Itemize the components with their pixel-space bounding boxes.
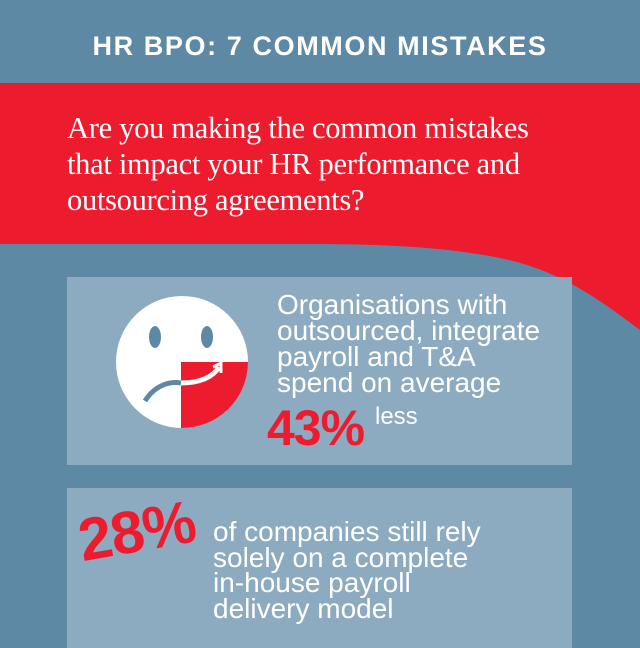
stat text: delivery model <box>213 592 394 624</box>
stat: 28%: 28% <box>73 488 200 574</box>
stat text: in-house payroll <box>213 567 411 598</box>
panel: in-house payroll <box>67 488 572 648</box>
stat text: outsourced, integrate <box>277 315 540 346</box>
stat text: solely on a complete <box>213 542 468 572</box>
title: HR BPO: 7 COMMON MISTAKES <box>92 31 548 61</box>
stat text: of companies still rely <box>213 516 481 547</box>
question text: that impact your HR performance and <box>67 147 520 181</box>
stat text: Organisations with <box>277 289 507 320</box>
label: less: less <box>375 403 418 430</box>
stat: 43%: 43% <box>267 400 364 456</box>
icon: half smiley face <box>116 296 248 428</box>
stat text <box>277 289 540 398</box>
question text: outsourcing agreements? <box>67 183 364 217</box>
stat text: payroll and T&A <box>277 341 476 372</box>
question text: Are you making the common mistakes <box>67 111 529 145</box>
stat text: spend on average <box>277 367 501 398</box>
stat text <box>213 516 481 624</box>
question text <box>67 111 529 217</box>
panel: integrated payroll <box>67 277 572 465</box>
